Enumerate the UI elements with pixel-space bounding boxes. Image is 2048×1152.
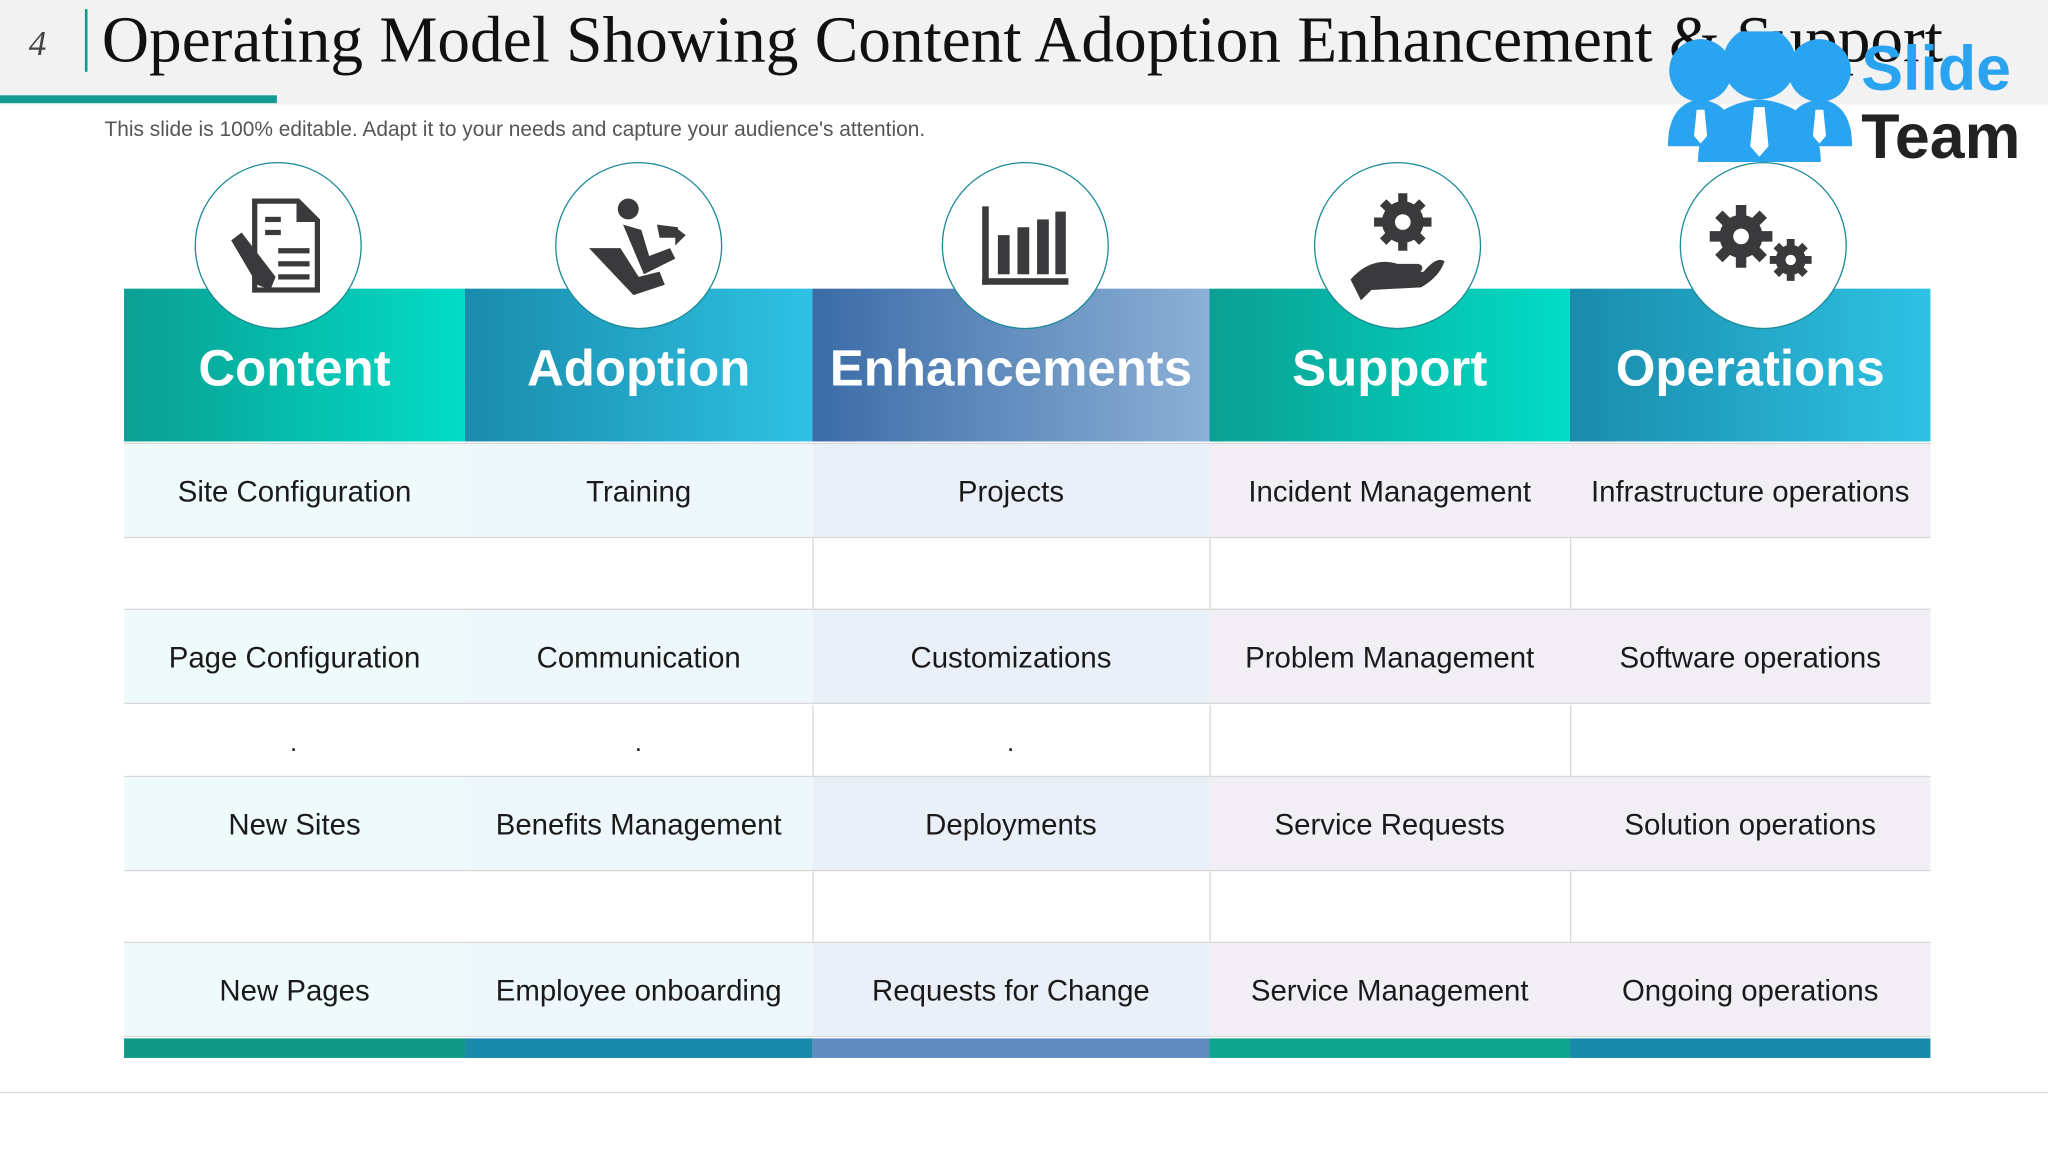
logo: Slide [1861,35,2011,104]
text: Support [1292,340,1487,396]
text: Infrastructure operations [1591,475,1909,508]
icon: hand with gear [1314,162,1481,329]
text: Enhancements [830,340,1192,396]
text: Adoption [527,340,750,396]
text: Customizations [910,641,1111,674]
rows: adoption column [465,442,812,1037]
text: Communication [537,641,741,674]
text: Requests for Change [872,974,1150,1007]
header band [0,0,2048,104]
text: Site Configuration [178,475,411,508]
table background columns [124,441,465,1038]
text: Benefits Management [496,808,782,841]
text: Training [586,475,691,508]
text: Software operations [1620,641,1881,674]
bottom bars [124,1038,1930,1058]
text: New Pages [219,974,370,1007]
text: Employee onboarding [496,974,782,1007]
logo: Team [1861,103,2020,172]
rows: support column [1210,442,1570,1037]
text: New Sites [228,808,361,841]
icon: document with pen [195,162,362,329]
text: . [290,729,297,758]
icon: person reclining [555,162,722,329]
text: Ongoing operations [1622,974,1878,1007]
column headers [124,289,465,441]
text: Deployments [925,808,1097,841]
rows: enhancements column [812,442,1210,1037]
text: Problem Management [1245,641,1534,674]
text: Incident Management [1248,475,1531,508]
text: Operations [1616,340,1885,396]
rows: content column [124,442,465,1037]
icon: gears [1680,162,1847,329]
icon: bar chart [942,162,1109,329]
text: . [1007,729,1014,758]
text: Solution operations [1624,808,1876,841]
column headers: Content [198,340,391,396]
text: . [635,729,642,758]
slide number: 4 [29,24,46,63]
text: Page Configuration [169,641,420,674]
text: Service Requests [1275,808,1505,841]
logo [1668,31,2020,172]
subtitle: This slide is 100% editable. Adapt it to your needs and capture your audience's attention. [104,119,925,141]
title: Operating Model Showing Content Adoption Enhancement & Support [102,3,1943,76]
text: Service Management [1251,974,1529,1007]
text: Projects [958,475,1064,508]
rows: operations column [1570,442,1930,1037]
